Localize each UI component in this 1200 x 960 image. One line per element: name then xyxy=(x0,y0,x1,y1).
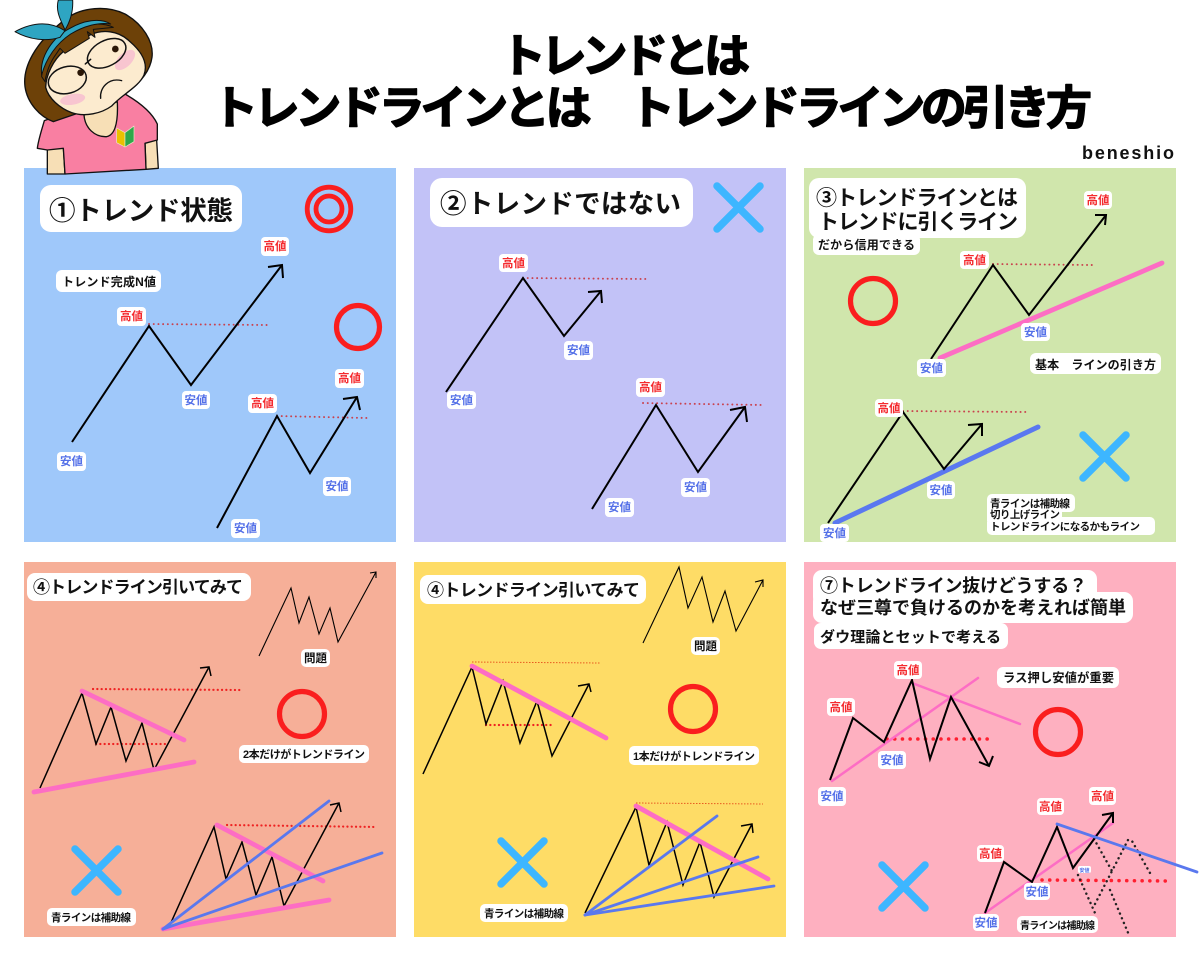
label: low start: 安値 xyxy=(974,916,998,930)
icon: cross xyxy=(501,841,544,884)
panel: 2 not a trend xyxy=(414,168,786,542)
chart: upper failed wave xyxy=(446,278,647,392)
label: high top small: 高値 xyxy=(338,371,361,385)
panel: 4 draw lines yellow xyxy=(414,562,786,937)
label: tiny low: 安値 xyxy=(1079,867,1090,874)
headband xyxy=(41,20,111,75)
label: low xyxy=(1021,323,1050,341)
label: low xyxy=(564,341,593,360)
glasses xyxy=(45,32,131,98)
label: high: 高値 xyxy=(963,253,986,267)
chart: correct line xyxy=(423,662,606,774)
label: low xyxy=(1024,883,1050,900)
note: helper line: 切り上げライン xyxy=(990,508,1060,521)
heading: panel 3: ③トレンドラインとは xyxy=(816,187,1018,210)
icon: circle xyxy=(336,306,380,348)
chart: wrong lines xyxy=(585,803,774,915)
icon: cross xyxy=(882,865,925,908)
label: high peak: 高値 xyxy=(896,663,920,677)
label: low lower mid: 安値 xyxy=(684,480,707,494)
caption: dow theory xyxy=(814,623,1008,649)
label: high xyxy=(960,251,989,269)
chart: problem xyxy=(259,572,376,656)
cheeks xyxy=(59,46,139,107)
caption: helper lines xyxy=(480,904,568,922)
bangs xyxy=(42,24,113,82)
title: トレンドとは xyxy=(500,30,750,82)
heading: panel 1: ①トレンド状態 xyxy=(49,196,233,226)
label: low lower xyxy=(927,481,955,499)
label: low: 安値 xyxy=(567,343,590,357)
label: low start: 安値 xyxy=(60,454,83,468)
note: helper line: トレンドラインになるかもライン xyxy=(990,521,1140,533)
heading: panel 5: ④トレンドライン引いてみて xyxy=(427,581,640,600)
chart: small N wave xyxy=(217,397,367,528)
caption: basics: 基本 ラインの引き方 xyxy=(1035,357,1156,372)
heading: panel 3 xyxy=(809,178,1026,238)
caption: problem xyxy=(691,637,720,655)
caption: N wave xyxy=(56,270,161,292)
title: トレンドラインとは トレンドラインの引き方 xyxy=(212,82,1092,134)
caption: problem: 問題 xyxy=(694,640,717,653)
label: high lower xyxy=(636,378,665,397)
chart: uptrend with scenarios xyxy=(985,813,1197,935)
label: low lower start xyxy=(605,498,634,517)
panel: 1 trend state xyxy=(24,168,396,542)
label: low small start: 安値 xyxy=(234,521,257,535)
label: low lower start xyxy=(820,524,849,542)
label: low middle xyxy=(878,751,906,769)
caption: last push xyxy=(997,667,1119,688)
icon: cross xyxy=(1083,435,1126,478)
caption: reliable: だから信用できる xyxy=(818,237,915,252)
caption: one line: 1本だけがトレンドライン xyxy=(633,749,755,763)
label: low start: 安値 xyxy=(450,393,473,407)
label: high peak xyxy=(894,661,922,679)
label: high: 高値 xyxy=(120,309,143,323)
heading: panel 4: ④トレンドライン引いてみて xyxy=(33,578,243,597)
chart: large N wave xyxy=(72,265,283,442)
label: high top xyxy=(1084,191,1112,209)
pupils xyxy=(77,46,119,76)
heading: panel 6 xyxy=(813,570,1133,623)
panel: 3 what is a trendline xyxy=(804,168,1176,542)
label: low: 安値 xyxy=(1024,325,1047,339)
icon: circle xyxy=(1036,710,1080,754)
label: low small mid: 安値 xyxy=(326,479,349,493)
caption: problem xyxy=(301,649,330,667)
chart: problem xyxy=(643,567,763,643)
label: high small: 高値 xyxy=(251,396,274,410)
label: high lower: 高値 xyxy=(639,380,662,394)
heading: panel 4 xyxy=(27,573,251,601)
label: high small xyxy=(248,394,277,413)
label: high left: 高値 xyxy=(830,700,853,714)
label: high lower: 高値 xyxy=(878,401,901,415)
caption: problem: 問題 xyxy=(304,652,327,665)
label: low start: 安値 xyxy=(920,361,943,375)
caption: two lines: 2本だけがトレンドライン xyxy=(243,747,365,761)
label: low: 安値 xyxy=(1026,884,1049,898)
neck xyxy=(84,102,117,137)
chart: wrong lines xyxy=(163,801,382,929)
caption: N wave: トレンド完成N値 xyxy=(62,274,156,289)
note: helper line: 青ラインは補助線 xyxy=(990,497,1070,510)
caption: helper lines: 青ラインは補助線 xyxy=(51,911,132,924)
caption: reliable xyxy=(813,234,920,255)
chart: upper wave with trendline xyxy=(931,215,1162,359)
icon: circle xyxy=(850,278,896,324)
title xyxy=(212,30,1092,134)
label: low lower: 安値 xyxy=(930,483,953,497)
icon: cross xyxy=(75,849,118,892)
mouth xyxy=(101,80,122,98)
arms xyxy=(47,140,158,174)
heading: panel 3: トレンドに引くライン xyxy=(818,211,1018,234)
caption: helper lines: 青ラインは補助線 xyxy=(484,907,564,920)
label: high mid: 高値 xyxy=(1039,800,1062,814)
label: low small mid xyxy=(323,477,351,496)
label: high left xyxy=(827,698,855,716)
label: high xyxy=(499,254,528,272)
heading: panel 5 xyxy=(420,575,646,604)
label: low middle: 安値 xyxy=(184,393,208,407)
label: low lower start: 安値 xyxy=(608,500,631,514)
icon: circle xyxy=(280,692,324,736)
heading: panel 1 xyxy=(40,185,242,232)
label: low start xyxy=(57,452,86,471)
shirt xyxy=(37,94,157,174)
label: low lower start: 安値 xyxy=(823,526,846,540)
panel: 4 draw lines salmon xyxy=(24,562,396,937)
label: low start xyxy=(973,914,999,931)
label: high: 高値 xyxy=(502,256,525,270)
author credit: beneshio xyxy=(1082,143,1174,163)
label: high lower xyxy=(875,399,903,417)
label: high top: 高値 xyxy=(1086,193,1110,207)
label: low middle: 安値 xyxy=(880,753,904,767)
character illustration xyxy=(15,0,158,174)
label: low middle xyxy=(182,391,210,409)
caption: two lines xyxy=(239,745,369,763)
heading: panel 2: ②トレンドではない xyxy=(440,189,681,219)
icon: double circle xyxy=(307,187,351,231)
panel: 7 trendline break xyxy=(804,562,1197,937)
chart: head and shoulders xyxy=(830,678,1020,781)
note: helper line xyxy=(987,494,1155,535)
heading: panel 6: ⑦トレンドライン抜けどうする？ xyxy=(820,576,1087,596)
label: high xyxy=(117,307,146,326)
face xyxy=(46,32,145,115)
heading: panel 2 xyxy=(430,178,693,227)
chart: lower wave with helper line xyxy=(828,411,1038,523)
label: high top xyxy=(261,237,289,256)
label: low start xyxy=(917,359,946,377)
icon: circle xyxy=(670,686,716,732)
caption: dow theory: ダウ理論とセットで考える xyxy=(820,628,1001,646)
label: high top: 高値 xyxy=(264,239,287,253)
icon: cross xyxy=(717,186,760,229)
heading: panel 6: なぜ三尊で負けるのかを考えれば簡単 xyxy=(820,597,1126,618)
label: low lower mid xyxy=(681,478,710,497)
hair xyxy=(25,8,152,122)
label: high top xyxy=(1089,787,1116,805)
label: tiny low xyxy=(1078,866,1091,874)
label: low start xyxy=(818,787,846,806)
label: high left: 高値 xyxy=(979,846,1002,860)
label: low start xyxy=(447,391,476,409)
chart: lower failed wave xyxy=(592,403,763,509)
caption: helper lines xyxy=(1017,916,1098,933)
label: low start: 安値 xyxy=(820,789,844,803)
caption: one line xyxy=(629,746,759,765)
label: high mid xyxy=(1037,798,1064,815)
ribbon xyxy=(15,0,73,40)
caption: helper lines: 青ラインは補助線 xyxy=(1020,919,1095,932)
beginner badge xyxy=(117,126,134,147)
label: high top small xyxy=(335,369,364,388)
caption: helper lines xyxy=(47,908,136,926)
label: high top: 高値 xyxy=(1091,789,1114,803)
label: low small start xyxy=(231,519,260,538)
caption: basics xyxy=(1030,353,1161,374)
chart: correct lines xyxy=(34,667,242,792)
label: high left xyxy=(977,845,1004,862)
caption: last push: ラス押し安値が重要 xyxy=(1003,670,1114,685)
